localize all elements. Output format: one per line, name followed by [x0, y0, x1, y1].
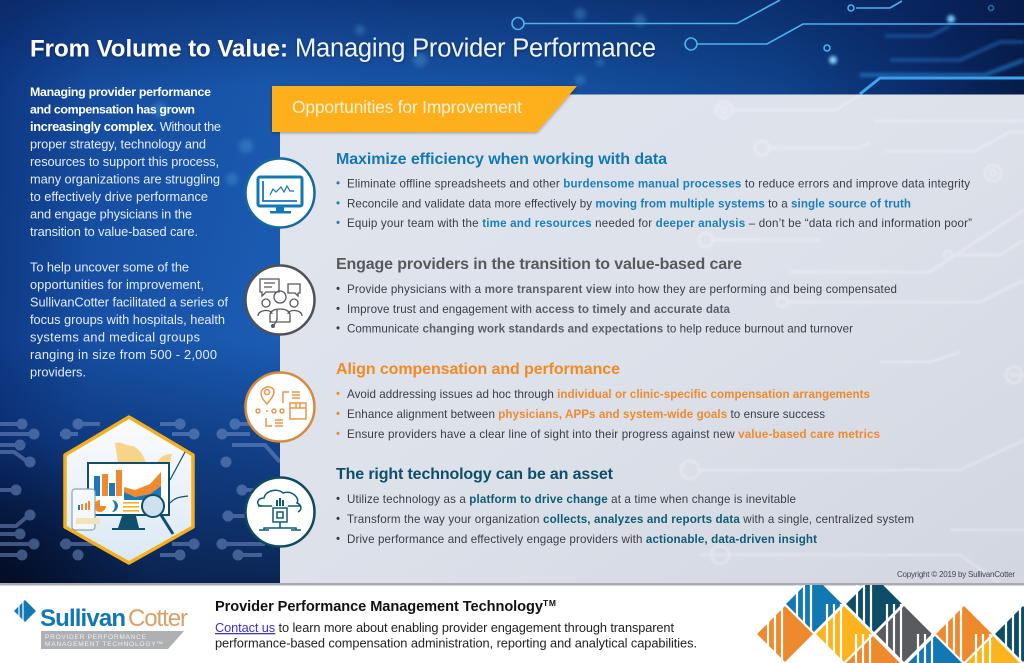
bullets: •	[336, 428, 340, 440]
panel: opportunities background	[280, 94, 1024, 584]
intro text: focus groups with hospitals, health	[30, 312, 225, 327]
intro text: Managing provider performance	[30, 85, 211, 99]
bullets: •	[336, 532, 340, 546]
bullets: Reconcile and validate data more effectively by moving from multiple systems to a single source of truth	[347, 198, 911, 210]
icon: logo diamond	[14, 599, 36, 623]
icon: cloud chip	[246, 478, 314, 546]
footer background	[0, 586, 1024, 663]
leaves	[115, 443, 172, 463]
bullets: Avoid addressing issues ad hoc through individual or clinic-specific compensation arrangements	[347, 388, 870, 401]
heading: Align compensation and performance	[336, 361, 620, 378]
icon: monitor with chart	[246, 158, 314, 228]
bullets: •	[336, 408, 340, 420]
monitor	[88, 463, 169, 515]
heading: Maximize efficiency when working with data	[336, 151, 667, 168]
bullets: Drive performance and effectively engage providers with actionable, data-driven insight	[347, 533, 817, 546]
intro text: and compensation has grown	[30, 102, 195, 116]
decorative diamond pattern	[757, 585, 1024, 663]
intro text	[30, 85, 228, 380]
circuit pads, lower left	[0, 418, 280, 560]
bullets	[336, 177, 972, 230]
section: engage providers	[246, 256, 897, 336]
footer heading: TM	[543, 598, 556, 608]
intro text: SullivanCotter facilitated a series of	[30, 294, 228, 310]
footer heading: Provider Performance Management Technology	[215, 599, 544, 615]
bullets: •	[336, 322, 340, 335]
bullets: •	[336, 302, 340, 316]
phone	[72, 489, 95, 530]
magnifier	[142, 495, 164, 517]
copyright: Copyright © 2019 by SullivanCotter	[897, 570, 1015, 579]
logo: SullivanCotter: Cotter	[128, 605, 188, 632]
footer separator	[0, 583, 1024, 586]
faint circuit lines	[681, 95, 1024, 583]
title: Managing Provider Performance	[295, 34, 656, 62]
illustration: analytics hexagon	[65, 417, 193, 563]
intro text: many organizations are struggling	[30, 172, 220, 186]
bullets	[336, 282, 897, 336]
bullets: •	[336, 282, 340, 296]
bullets: Provide physicians with a more transparent view into how they are performing and being compensated	[347, 283, 897, 296]
intro text: increasingly complex. Without the	[30, 119, 221, 134]
bullets: Equip your team with the time and resources needed for deeper analysis – don’t be “data rich and information poor”	[347, 217, 972, 230]
bullets: •	[336, 197, 340, 210]
title	[30, 34, 656, 62]
bullets: Utilize technology as a platform to drive change at a time when change is inevitable	[347, 493, 796, 506]
intro text: and engage physicians in the	[30, 206, 192, 222]
logo: SullivanCotter: MANAGEMENT TECHNOLOGY™	[45, 641, 163, 648]
intro text: to effectively drive performance	[30, 189, 208, 204]
intro text: resources to support this process,	[30, 154, 219, 169]
intro text: ranging in size from 500 - 2,000	[30, 347, 217, 362]
bullets: Enhance alignment between physicians, APPs and system-wide goals to ensure success	[347, 408, 825, 421]
logo: SullivanCotter	[14, 599, 188, 649]
circuit lines, top right	[512, 0, 1024, 94]
footer text	[215, 620, 697, 650]
bullets: Ensure providers have a clear line of sight into their progress against new value-based care metrics	[347, 428, 880, 441]
intro text: proper strategy, technology and	[30, 136, 206, 152]
bullets: Communicate changing work standards and expectations to help reduce burnout and turnover	[347, 322, 853, 336]
footer text: performance-based compensation administration, reporting and analytical capabilities.	[215, 636, 697, 650]
section: maximize efficiency	[246, 151, 972, 230]
intro text: systems and medical groups	[30, 330, 200, 344]
bullets: •	[336, 388, 340, 400]
bullets: •	[336, 492, 340, 506]
logo: SullivanCotter: Sullivan	[40, 605, 126, 632]
bullets: Improve trust and engagement with access to timely and accurate data	[347, 303, 731, 316]
bullets: Eliminate offline spreadsheets and other burdensome manual processes to reduce errors and improve data integrity	[347, 178, 970, 190]
bullets	[336, 492, 914, 546]
bullets: Transform the way your organization collects, analyzes and reports data with a single, centralized system	[347, 513, 914, 526]
bullets: •	[336, 512, 340, 526]
bullets: •	[336, 216, 340, 230]
bullets: •	[336, 177, 340, 190]
logo: SullivanCotter: PROVIDER PERFORMANCE	[45, 634, 147, 641]
icon: location and package	[246, 372, 314, 442]
intro text: opportunities for improvement,	[30, 277, 204, 292]
intro text: To help uncover some of the	[30, 260, 189, 274]
banner: opportunities for improvement: Opportunities for Improvement	[292, 97, 522, 117]
section: align compensation	[246, 361, 880, 442]
heading: Engage providers in the transition to value-based care	[336, 256, 742, 273]
footer text: Contact us to learn more about enabling provider engagement through transparent	[215, 620, 674, 635]
bullets	[336, 388, 880, 441]
title: From Volume to Value:	[30, 36, 288, 62]
heading: The right technology can be an asset	[336, 466, 614, 483]
icon: care team	[246, 266, 314, 334]
section: right technology	[246, 466, 914, 546]
intro text: transition to value-based care.	[30, 224, 198, 239]
intro text: providers.	[30, 364, 86, 380]
banner: opportunities for improvement	[272, 86, 577, 132]
